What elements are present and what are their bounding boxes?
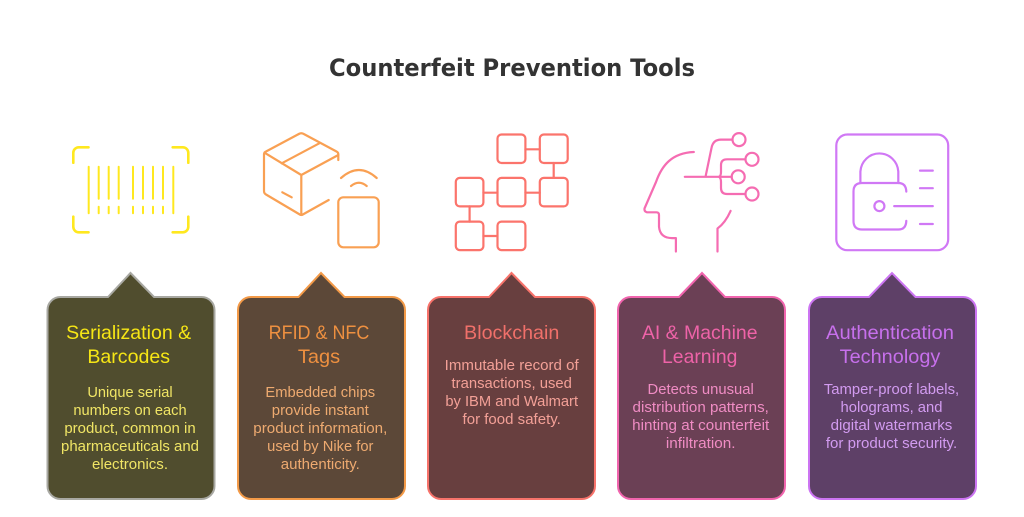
text: RFID description: provide instant (272, 403, 369, 419)
text: RFID description: Embedded chips (265, 385, 375, 401)
title: Counterfeit Prevention Tools (329, 54, 695, 82)
heading: blockchain: Blockchain (464, 322, 559, 344)
icon: head with network (644, 133, 758, 252)
icon: barcode (73, 147, 188, 232)
heading: RFID and NFC tags (269, 322, 369, 368)
text: authentication description: Tamper-proof labels, (824, 382, 959, 398)
text: blockchain description (445, 358, 580, 428)
heading: serialization and barcodes (66, 322, 191, 368)
heading: authentication technology: Authentication (826, 322, 954, 344)
heading: RFID and NFC tags: RFID & NFC (269, 322, 369, 344)
panel: blockchain (428, 273, 595, 499)
text: RFID description: authenticity. (281, 457, 360, 473)
text: blockchain description: for food safety. (463, 412, 561, 428)
text: authentication description: digital watermarks (831, 418, 952, 434)
text: serialization description: electronics. (92, 457, 168, 473)
heading: serialization and barcodes: Serialization & (66, 322, 191, 344)
text: RFID description (253, 385, 387, 473)
heading: RFID and NFC tags: Tags (298, 346, 340, 368)
text: blockchain description: Immutable record of (445, 358, 580, 374)
text: serialization description: numbers on each (73, 403, 187, 419)
heading: authentication technology: Technology (840, 346, 941, 368)
heading: serialization and barcodes: Barcodes (87, 346, 170, 368)
text: authentication description (824, 382, 959, 452)
text: AI description: distribution patterns, (633, 400, 769, 416)
text: serialization description (61, 385, 199, 473)
text: serialization description: Unique serial (87, 385, 173, 401)
heading: AI and machine learning: AI & Machine (642, 322, 758, 344)
text: serialization description: product, common in (64, 421, 196, 437)
text: authentication description: for product security. (826, 436, 957, 452)
panel: authentication technology (809, 273, 976, 499)
text: RFID description: product information, (253, 421, 387, 437)
text: AI description (632, 382, 769, 452)
text: RFID description: used by Nike for (267, 439, 374, 455)
icon: box with NFC tag (264, 133, 379, 247)
heading: authentication technology (826, 322, 954, 368)
icon: security lock (836, 134, 948, 250)
text: blockchain description: transactions, used (452, 376, 572, 392)
panel: RFID and NFC tags (238, 273, 405, 499)
text: AI description: hinting at counterfeit (632, 418, 769, 434)
text: serialization description: pharmaceuticals and (61, 439, 199, 455)
panel: serialization and barcodes (48, 273, 214, 499)
text: authentication description: holograms, and (840, 400, 942, 416)
text: blockchain description: by IBM and Walmart (445, 394, 578, 410)
heading: AI and machine learning: Learning (662, 346, 737, 368)
panel: AI and machine learning (618, 273, 785, 499)
icon: blockchain (456, 134, 568, 250)
text: AI description: Detects unusual (648, 382, 754, 398)
heading: AI and machine learning (642, 322, 758, 368)
text: AI description: infiltration. (666, 436, 736, 452)
